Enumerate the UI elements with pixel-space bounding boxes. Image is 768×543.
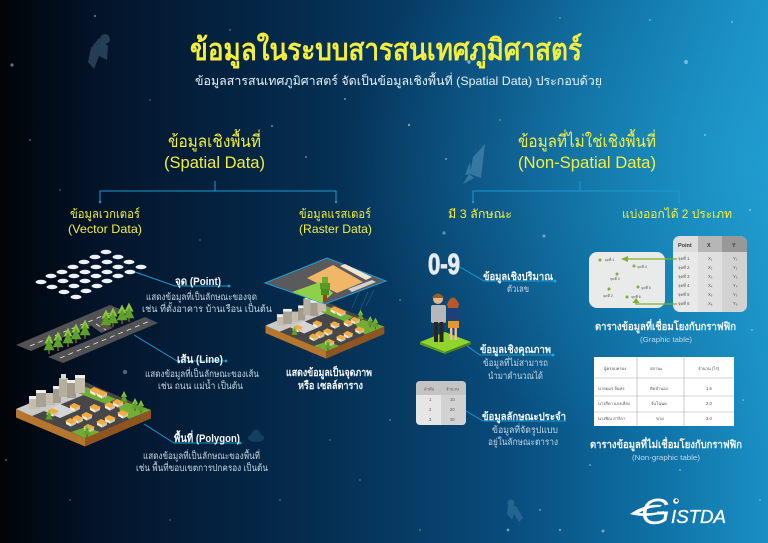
graphic table: attribute table: Y₅ xyxy=(733,292,738,297)
leader and label: polygon xyxy=(144,424,241,445)
icon: attribute table: 10 xyxy=(450,397,455,402)
icon: two people on grass tile xyxy=(420,294,471,354)
icon: attribute table: 30 xyxy=(450,417,455,422)
non-graphic table: นายอมร จันทร xyxy=(598,386,625,391)
description: line: เช่น ถนน แม่น้ำ เป็นต้น xyxy=(158,379,243,392)
leader and label: point xyxy=(135,272,230,289)
graphic table: attribute table: X₂ xyxy=(708,265,713,270)
graphic table: attribute table xyxy=(673,236,747,312)
description: attribute xyxy=(488,423,558,448)
graphic table: map panel: จุดที่ 1 xyxy=(604,257,614,263)
description: point: แสดงข้อมูลที่เป็นลักษณะของจุด xyxy=(146,290,257,303)
graphic table: attribute table: Y₆ xyxy=(733,301,738,306)
non-graphic table: 2.0 xyxy=(706,401,712,406)
heading: non-spatial data: ข้อมูลที่ไม่ใช่เชิงพื้นที่ xyxy=(518,129,656,152)
description: quantitative: ตัวเลข xyxy=(507,284,529,295)
graphic table: attribute table: จุดที่ 5 xyxy=(678,291,690,298)
leader and label: quantitative: ข้อมูลเชิงปริมาณ xyxy=(483,270,553,284)
leader and label: qualitative: ข้อมูลเชิงคุณภาพ xyxy=(480,343,551,357)
leader and label: polygon: พื้นที่ (Polygon) xyxy=(174,430,240,445)
graphic table: attribute table: Y₁ xyxy=(733,256,738,261)
title: ข้อมูลในระบบสารสนเทศภูมิศาสตร์ xyxy=(190,32,582,69)
icon: attribute table: 20 xyxy=(450,407,455,412)
graphic table: attribute table: จุดที่ 3 xyxy=(678,273,690,280)
icon: faint alien ship xyxy=(248,430,264,442)
leader and label: attribute xyxy=(466,410,566,424)
raster pixel grid plane xyxy=(265,258,386,310)
heading: three characteristics: มี 3 ลักษณะ xyxy=(448,207,512,221)
point layer: white ellipses xyxy=(36,250,146,299)
icon: attribute table: 3 xyxy=(429,417,432,422)
caption: graphic table: (Graphic table) xyxy=(640,335,693,344)
polygon layer: isometric city xyxy=(16,374,151,446)
non-graphic table xyxy=(594,357,734,426)
description: polygon xyxy=(136,449,268,474)
graphic table: map panel: จุดที่ 3 xyxy=(610,276,620,282)
icon: attribute table: 1 xyxy=(429,397,432,402)
graphic table: attribute table: Point xyxy=(678,243,692,249)
graphic table: map panel: จุดที่ 2 xyxy=(603,293,613,299)
non-graphic table: ผู้ครอบครอง xyxy=(604,366,626,372)
description: polygon: เช่น พื้นที่ขอบเขตการปกครอง เป็นต้น xyxy=(136,461,268,474)
description: point: เช่น ที่ตั้งอาคาร บ้านเรือน เป็นต้น xyxy=(142,302,272,315)
leader and label: attribute: ข้อมูลลักษณะประจำ xyxy=(482,410,566,424)
bracket: non-spatial branches xyxy=(472,181,680,203)
graphic table: attribute table: Y₃ xyxy=(733,274,738,279)
graphic table: map panel: จุดที่ 6 xyxy=(631,294,641,300)
graphic table: map panel xyxy=(589,252,665,308)
non-graphic table: สถานะ xyxy=(650,366,663,371)
heading: vector data: ข้อมูลเวกเตอร์ xyxy=(70,207,141,222)
graphic table: attribute table: Y₂ xyxy=(733,265,738,270)
caption: raster: แสดงข้อมูลเป็นจุดภาพ xyxy=(286,365,372,380)
caption: non-graphic table: ตารางข้อมูลที่ไม่เชื่อมโยงกับกราฟฟิก xyxy=(590,436,742,452)
bracket: spatial branches xyxy=(99,181,337,203)
graphic table: attribute table: จุดที่ 6 xyxy=(678,300,690,307)
non-graphic table: จับโฉนด xyxy=(651,401,667,406)
raster city xyxy=(266,295,384,359)
graphic table: attribute table: X₅ xyxy=(708,292,713,297)
graphic table: attribute table: Y xyxy=(732,243,736,249)
graphic table: attribute table: จุดที่ 2 xyxy=(678,264,690,271)
description: line xyxy=(145,367,259,392)
icon: attribute table: ลำดับ xyxy=(424,386,435,392)
leader and label: line xyxy=(134,335,227,366)
subtitle: ข้อมูลสารสนเทศภูมิศาสตร์ จัดเป็นข้อมูลเชิงพื้นที่ (Spatial Data) ประกอบด้วย xyxy=(195,72,602,89)
heading: spatial data xyxy=(164,129,265,172)
leader and label: line: เส้น (Line) xyxy=(177,353,223,366)
heading: non-spatial data xyxy=(518,129,656,172)
heading: raster data xyxy=(299,207,372,236)
non-graphic table: จำนวน (ไร่) xyxy=(698,365,720,371)
graphic table: attribute table: X₆ xyxy=(708,301,713,306)
heading: two types: แบ่งออกได้ 2 ประเภท xyxy=(622,207,732,221)
arrows: table to map xyxy=(621,256,677,304)
icon: attribute table xyxy=(416,381,466,425)
graphic table: attribute table: X xyxy=(707,243,711,249)
non-graphic table: ขาย xyxy=(656,416,664,421)
heading: raster data: ข้อมูลแรสเตอร์ xyxy=(299,207,372,222)
description: qualitative xyxy=(483,356,548,382)
heading: vector data: (Vector Data) xyxy=(68,222,142,236)
caption: graphic table xyxy=(595,318,736,344)
icon: attribute table: 2 xyxy=(429,407,432,412)
icon: faint rocket xyxy=(463,144,485,184)
heading: spatial data: (Spatial Data) xyxy=(164,153,265,172)
graphic table: attribute table: X₃ xyxy=(708,274,713,279)
non-graphic table: ติดจำนอง xyxy=(650,386,668,391)
caption: non-graphic table xyxy=(590,436,742,462)
logo: GISTDA: G xyxy=(641,491,670,532)
description: line: แสดงข้อมูลที่เป็นลักษณะของเส้น xyxy=(145,367,259,380)
description: qualitative: ข้อมูลที่ไม่สามารถ xyxy=(483,356,548,369)
heading: vector data xyxy=(68,207,142,236)
logo: GISTDA xyxy=(630,491,726,532)
graphic table: attribute table: X₄ xyxy=(708,283,713,288)
icon: attribute table: จำนวน xyxy=(446,386,459,392)
icon: faint astronaut top xyxy=(88,34,110,69)
line layer: roads and trees xyxy=(16,302,158,363)
graphic table: attribute table: จุดที่ 1 xyxy=(678,255,690,262)
icon: 0-9 numerals: 0-9 xyxy=(428,249,460,281)
non-graphic table: นางพิณ สาลิกา xyxy=(598,416,625,421)
heading: spatial data: ข้อมูลเชิงพื้นที่ xyxy=(168,129,261,152)
leader and label: quantitative xyxy=(460,267,556,284)
description: attribute: ข้อมูลที่จัดรูปแบบ xyxy=(492,423,558,436)
description: qualitative: นำมาคำนวณได้ xyxy=(488,370,543,382)
caption: raster xyxy=(286,365,372,392)
non-graphic table: 3.0 xyxy=(706,416,712,421)
heading: non-spatial data: (Non-Spatial Data) xyxy=(518,153,656,172)
heading: raster data: (Raster Data) xyxy=(299,222,372,236)
graphic table: map panel: จุดที่ 5 xyxy=(641,285,651,291)
leader and label: qualitative xyxy=(467,343,554,357)
description: attribute: อยู่ในลักษณะตาราง xyxy=(488,436,558,448)
description: point xyxy=(142,290,272,315)
non-graphic table: 1.5 xyxy=(706,386,712,391)
caption: graphic table: ตารางข้อมูลที่เชื่อมโยงกับกราฟฟิก xyxy=(595,318,736,334)
caption: non-graphic table: (Non-graphic table) xyxy=(632,453,701,462)
description: polygon: แสดงข้อมูลที่เป็นลักษณะของพื้นที่ xyxy=(143,449,260,462)
graphic table: attribute table: X₁ xyxy=(708,256,713,261)
caption: raster: หรือ เซลล์ตาราง xyxy=(298,379,363,392)
icon: faint astronaut bottom xyxy=(507,500,523,522)
graphic table: attribute table: Y₄ xyxy=(733,283,738,288)
logo: GISTDA: ISTDA xyxy=(671,507,726,527)
graphic table: attribute table: จุดที่ 4 xyxy=(678,282,690,289)
leader and label: point: จุด (Point) xyxy=(175,276,221,289)
non-graphic table: นางสีดา แกงเลียง xyxy=(598,401,630,406)
graphic table: map panel: จุดที่ 4 xyxy=(637,264,647,270)
